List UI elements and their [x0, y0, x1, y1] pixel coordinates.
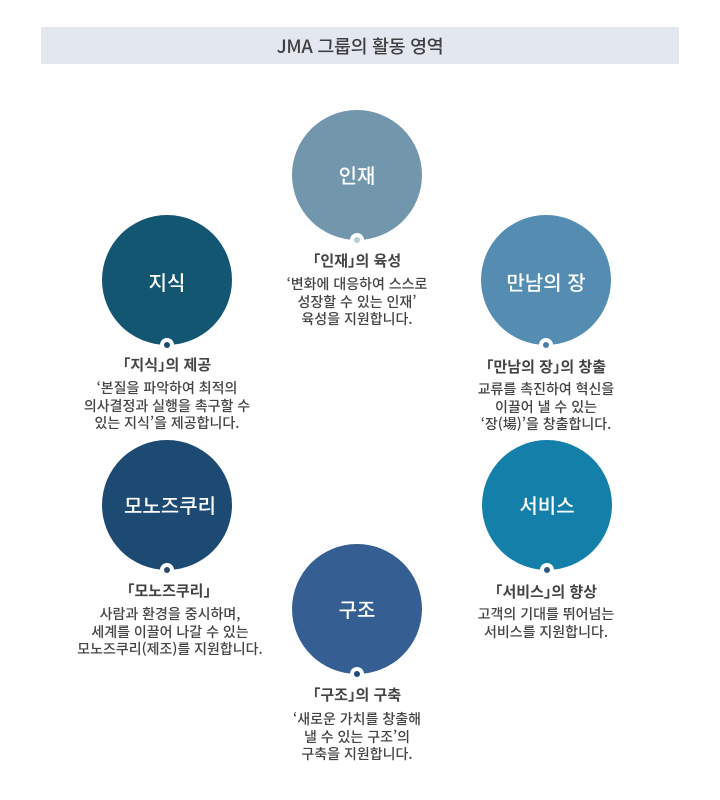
circle: 인재: 인재 — [339, 160, 375, 189]
text: 인재: 성장할 수 있는 인재’ — [298, 292, 416, 312]
text: 지식: ‘본질을 파악하여 최적의 — [97, 378, 237, 398]
heading: 구조: 「구조」의 구축 — [305, 684, 401, 705]
text: 만남의 장: 이끌어 낼 수 있는 — [495, 396, 597, 416]
heading: 만남의 장: 「만남의 장」의 창출 — [478, 356, 606, 377]
text: 모노즈쿠리: 세계를 이끌어 나갈 수 있는 — [91, 622, 249, 642]
text: 구조: ‘새로운 가치를 창출해 — [293, 709, 421, 729]
circle: 만남의 장: 만남의 장 — [506, 267, 586, 296]
text: 모노즈쿠리: 모노즈쿠리(제조)를 지원합니다. — [77, 639, 263, 659]
text: 지식: 있는 지식’을 제공합니다. — [94, 413, 240, 433]
text: 만남의 장 — [478, 379, 614, 434]
text: 지식 — [84, 378, 250, 433]
text: 지식: 의사결정과 실행을 촉구할 수 — [84, 396, 250, 416]
text: 구조: 구축을 지원합니다. — [301, 744, 413, 764]
circle: 구조 — [292, 544, 422, 674]
text: 구조 — [293, 709, 421, 764]
heading: 지식: 「지식」의 제공 — [115, 354, 211, 375]
text: 서비스 — [478, 604, 614, 642]
circle: 지식: 지식 — [149, 267, 185, 296]
circle: 지식 — [102, 215, 232, 345]
circle: 모노즈쿠리: 모노즈쿠리 — [124, 490, 216, 519]
title banner: JMA 그룹의 활동 영역 — [277, 33, 443, 59]
circle: 구조: 구조 — [339, 594, 375, 623]
text: 모노즈쿠리: 사람과 환경을 중시하며, — [100, 604, 240, 624]
text: 모노즈쿠리 — [77, 604, 263, 659]
text: 인재: ‘변화에 대응하여 스스로 — [287, 274, 427, 294]
circle: 서비스 — [482, 440, 612, 570]
text: 인재 — [287, 274, 427, 329]
circle: 인재 — [292, 110, 422, 240]
title banner — [41, 27, 679, 64]
circle: 모노즈쿠리 — [102, 440, 232, 570]
text: 만남의 장: ‘장(場)’을 창출합니다. — [481, 414, 611, 434]
circle: 만남의 장 — [481, 215, 611, 345]
text: 구조: 낼 수 있는 구조’의 — [304, 726, 410, 746]
text: 만남의 장: 교류를 촉진하여 혁신을 — [478, 379, 614, 399]
heading: 인재: 「인재」의 육성 — [305, 250, 401, 271]
heading: 서비스: 「서비스」의 향상 — [487, 581, 597, 602]
heading: 모노즈쿠리: 「모노즈쿠리」 — [119, 580, 219, 601]
text: 서비스: 서비스를 지원합니다. — [484, 622, 608, 642]
text: 인재: 육성을 지원합니다. — [301, 309, 413, 329]
text: 서비스: 고객의 기대를 뛰어넘는 — [478, 604, 614, 624]
circle: 서비스: 서비스 — [519, 490, 575, 519]
